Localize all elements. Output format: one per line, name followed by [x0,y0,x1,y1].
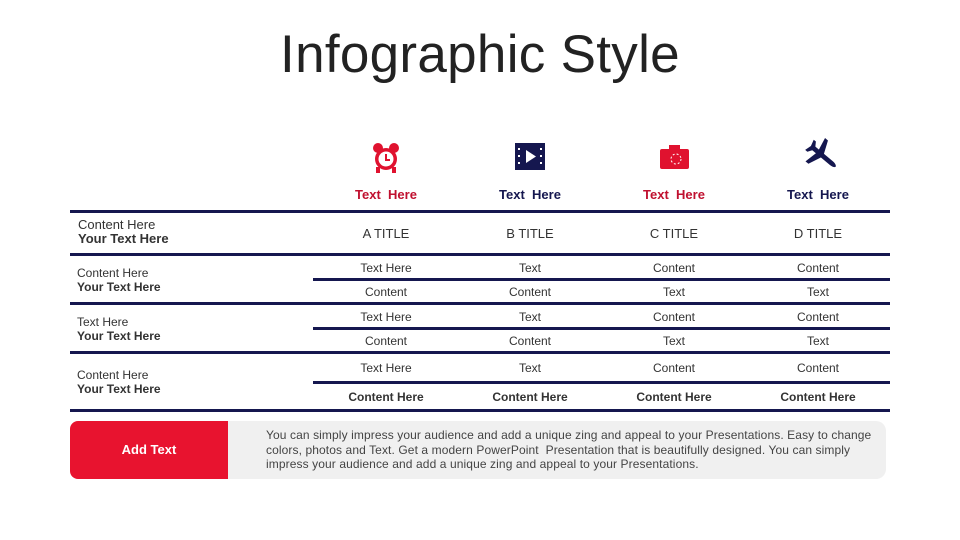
description text [228,421,886,479]
row labels: Your Text Here [77,382,161,396]
table body: Content [509,334,551,348]
table body: Content [797,261,839,275]
table body: Content [653,361,695,375]
table body: Content Here [492,390,568,404]
icon: alarm clock [373,143,399,173]
table body: A TITLE [363,226,409,241]
row labels: Your Text Here [77,280,161,294]
text: Text Here [643,187,705,202]
table body: Content Here [636,390,712,404]
table body: Text [663,285,685,299]
table body: Text [807,334,829,348]
row labels: Your Text Here [77,329,161,343]
row labels: Your Text Here [78,231,169,246]
title: Infographic Style [280,25,680,84]
text: Text Here [787,187,849,202]
table body: Content [797,310,839,324]
table body: Content [653,261,695,275]
table body: Content [797,361,839,375]
icon: video [515,143,545,170]
row labels: Text Here [77,315,128,329]
table body: Content [365,285,407,299]
red button: Add Text [122,442,176,457]
table body: Content Here [780,390,856,404]
row labels: Content Here [77,266,148,280]
table body: Text [663,334,685,348]
description text: You can simply impress your audience and add a unique zing and appeal to your Presentations. Easy to change colors, photos and Text. Get a modern PowerPoint Presentation that is beautifully designed. You can simply impress your audience and add a unique zing and appeal to your Presentations. [266,428,871,471]
table body: Text Here [360,361,412,375]
row labels: Content Here [77,368,148,382]
column headers [355,187,849,202]
table body: C TITLE [650,226,698,241]
row labels: Content Here [78,217,155,232]
table body: Content [365,334,407,348]
icon: camera [660,145,689,169]
row labels [77,217,169,396]
table body: D TITLE [794,226,842,241]
table body [348,226,856,404]
text: Text Here [355,187,417,202]
icon: airplane [805,138,836,168]
table body: B TITLE [506,226,554,241]
table body: Text [519,261,541,275]
table body: Text [519,361,541,375]
table body: Text [807,285,829,299]
red button [70,421,228,479]
table body: Text Here [360,310,412,324]
callout bar [70,421,886,479]
table body: Content [509,285,551,299]
table body: Text Here [360,261,412,275]
table body: Content [653,310,695,324]
table body: Text [519,310,541,324]
text: Text Here [499,187,561,202]
table body: Content Here [348,390,424,404]
